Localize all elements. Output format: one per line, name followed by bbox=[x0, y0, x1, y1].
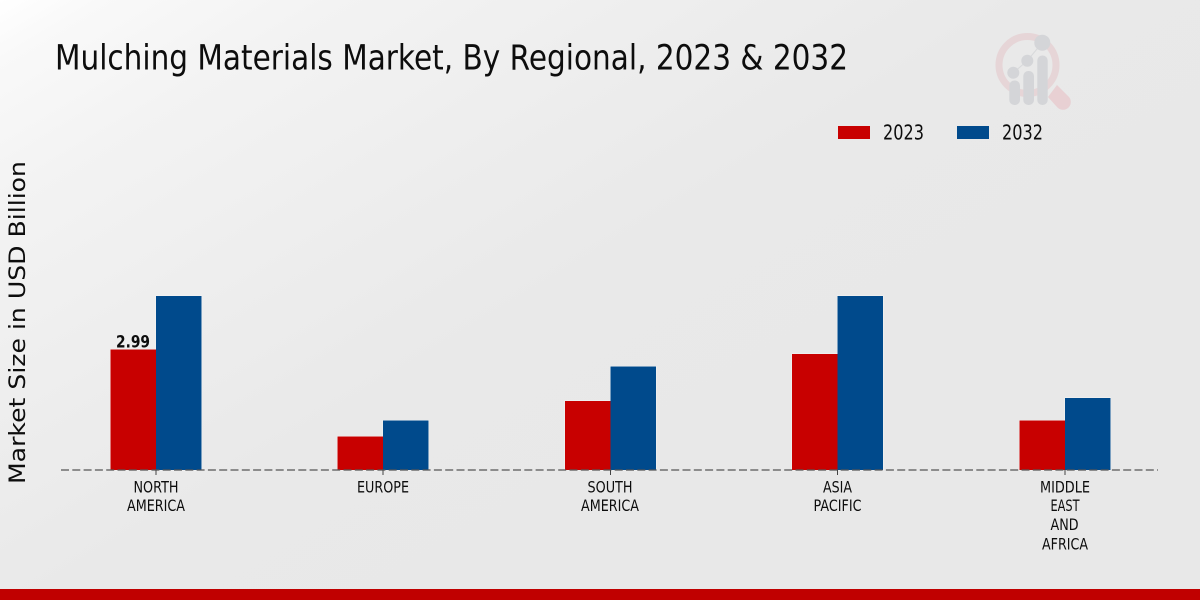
footer bar bbox=[0, 589, 1200, 600]
bars: South America bbox=[565, 366, 656, 470]
legend bbox=[838, 120, 1043, 144]
x-axis label: Middle East and Africa: AFRICA bbox=[1042, 534, 1088, 554]
x-axis label: Middle East and Africa bbox=[1040, 478, 1090, 554]
x-axis label: Asia Pacific: PACIFIC bbox=[814, 496, 862, 515]
bars: Middle East and Africa bbox=[1020, 398, 1110, 470]
bar chart bbox=[61, 296, 1158, 554]
y-axis title: Market Size in USD Billion bbox=[5, 161, 31, 484]
x-axis label: South America: SOUTH bbox=[588, 478, 632, 496]
x-axis label: North America: AMERICA bbox=[127, 496, 185, 515]
legend item: 2032: 2032 bbox=[1002, 120, 1043, 144]
x-axis label: North America bbox=[127, 478, 185, 515]
x-axis label: Asia Pacific: ASIA bbox=[823, 478, 852, 496]
x-axis label: Middle East and Africa: EAST bbox=[1050, 496, 1080, 515]
x-axis label: Asia Pacific bbox=[814, 478, 862, 515]
x-axis label: Middle East and Africa: MIDDLE bbox=[1040, 478, 1090, 496]
legend item: 2023: 2023 bbox=[883, 120, 924, 144]
x-axis label: Europe: EUROPE bbox=[357, 478, 409, 496]
legend item: 2032 bbox=[957, 120, 1043, 144]
bars: North America bbox=[110, 296, 202, 470]
x-axis baseline bbox=[61, 469, 1158, 471]
bars: Asia Pacific bbox=[792, 296, 883, 470]
icon: watermark logo magnifier with bars bbox=[999, 35, 1071, 110]
title: Mulching Materials Market, By Regional, 2023 & 2032 bbox=[55, 38, 848, 78]
legend item: 2023 bbox=[838, 120, 924, 144]
x-axis label: South America: AMERICA bbox=[581, 496, 639, 515]
x-axis label: South America bbox=[581, 478, 639, 515]
value label: 2.99: 2.99 bbox=[116, 332, 150, 352]
x-axis label: North America: NORTH bbox=[134, 478, 178, 496]
x-axis label: Middle East and Africa: AND bbox=[1050, 515, 1078, 534]
bars: Europe bbox=[338, 420, 428, 470]
